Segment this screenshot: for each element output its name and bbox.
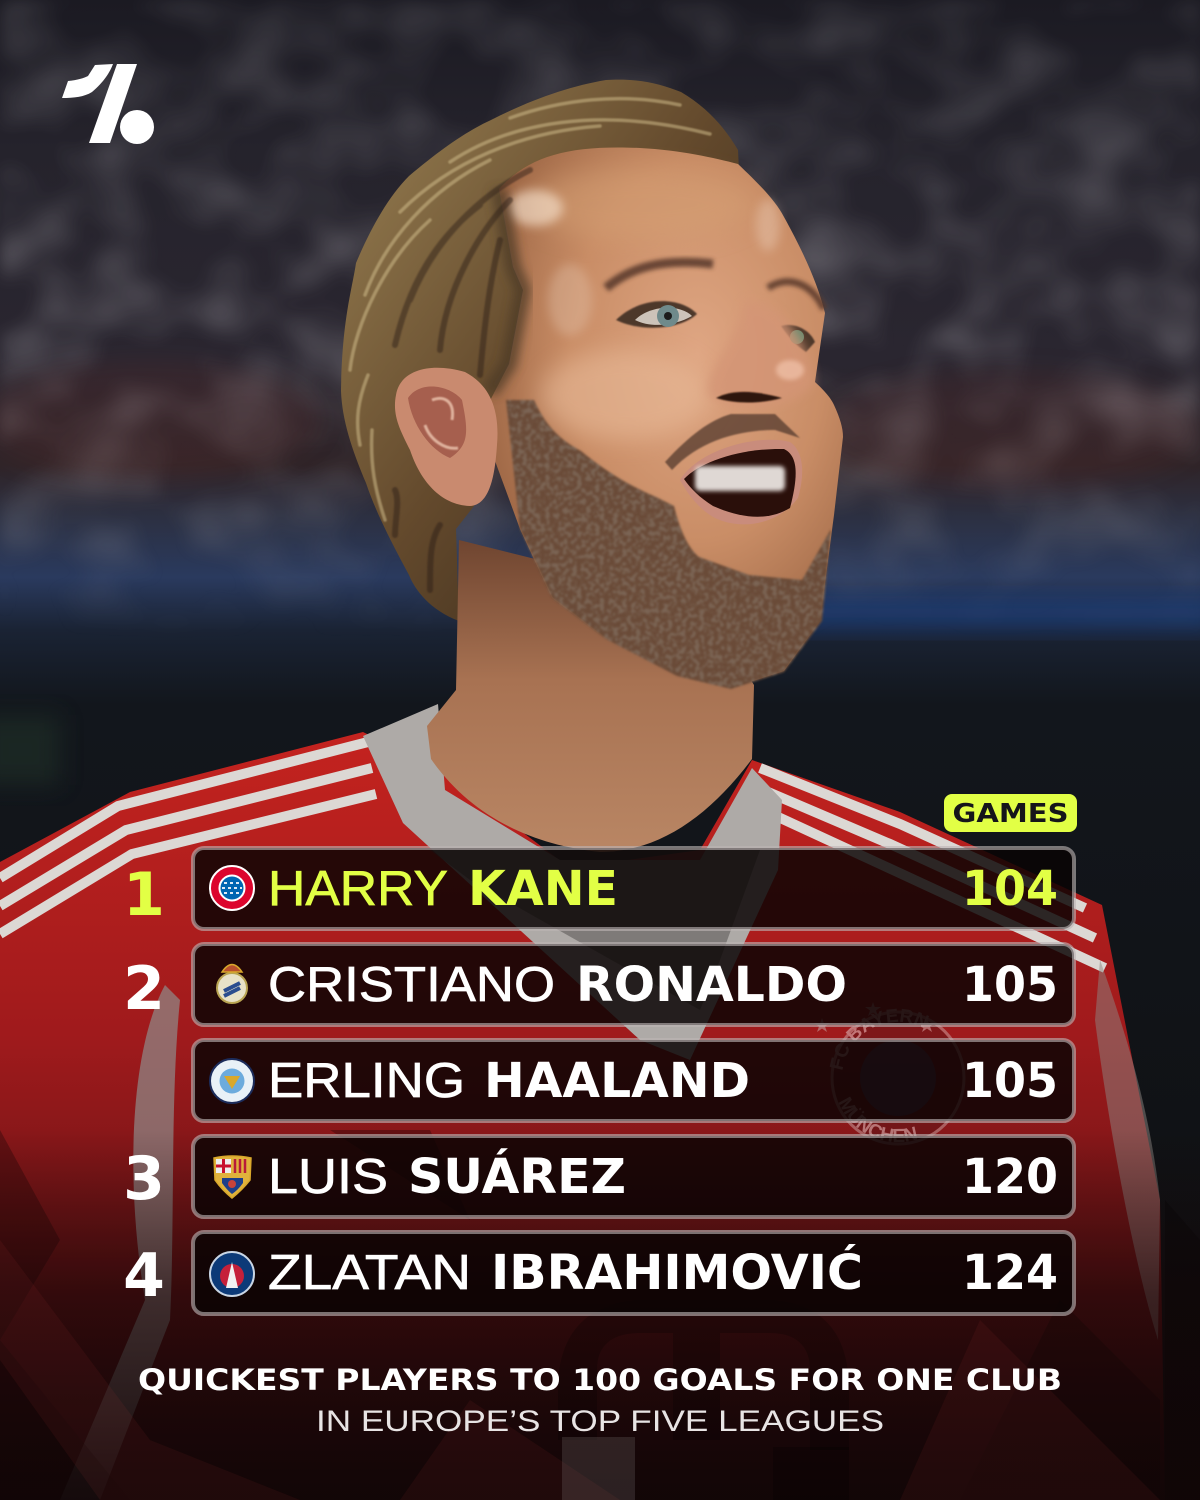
face xyxy=(480,147,843,688)
row: Erling Haaland: ERLING xyxy=(268,1054,465,1108)
rank 1: 1 xyxy=(123,860,165,930)
badge: games column header xyxy=(944,794,1077,832)
hairline shadow xyxy=(490,189,523,392)
crest: PSG xyxy=(210,1252,254,1296)
row: Cristiano Ronaldo: CRISTIANO xyxy=(268,958,555,1012)
row: Cristiano Ronaldo: RONALDO xyxy=(576,957,847,1013)
beard xyxy=(506,400,831,689)
badge: games column header: GAMES xyxy=(952,799,1068,829)
row: Erling Haaland xyxy=(193,1040,1074,1121)
crest: Barcelona xyxy=(214,1156,251,1198)
background: blurred stadium crowd xyxy=(0,0,1200,785)
crest: Real Madrid xyxy=(217,964,247,1003)
crest: Bayern xyxy=(210,866,254,910)
moustache xyxy=(665,414,800,470)
row: Zlatan Ibrahimović: 124 xyxy=(962,1245,1058,1301)
crest: Manchester City xyxy=(210,1059,254,1103)
eyes and brows xyxy=(606,262,824,352)
forehead and cheek lighting xyxy=(507,169,780,440)
caption: IN EUROPE’S TOP FIVE LEAGUES xyxy=(316,1405,884,1438)
grey underarm panels xyxy=(60,985,180,1500)
row: Luis Suárez: LUIS xyxy=(268,1150,388,1204)
rank 4: 4 xyxy=(123,1241,165,1311)
row: Erling Haaland: HAALAND xyxy=(484,1053,750,1109)
rank 3: 3 xyxy=(123,1144,165,1214)
shirt chevrons xyxy=(0,1130,1200,1500)
shirt number xyxy=(558,1300,849,1500)
row: Harry Kane: KANE xyxy=(468,861,618,917)
row: Cristiano Ronaldo xyxy=(193,944,1074,1025)
row: Zlatan Ibrahimović xyxy=(193,1232,1074,1314)
nose xyxy=(708,300,813,407)
bottom fade and chevron pattern xyxy=(0,1130,1200,1500)
caption: QUICKEST PLAYERS TO 100 GOALS FOR ONE CLUB xyxy=(138,1363,1062,1397)
jersey crest and stars: MÜNCHEN xyxy=(839,1097,917,1142)
row: Cristiano Ronaldo: 105 xyxy=(962,957,1058,1013)
jersey crest and stars: FC BAYERN xyxy=(830,1009,929,1070)
row: Zlatan Ibrahimović: IBRAHIMOVIĆ xyxy=(491,1244,863,1301)
sleeve stripes xyxy=(0,742,1105,968)
rank 2: 2 xyxy=(123,954,165,1024)
hair xyxy=(341,80,740,621)
logo: OneFootball xyxy=(62,64,154,144)
neck xyxy=(427,540,754,852)
jersey crest and stars xyxy=(817,1003,966,1146)
hair strands xyxy=(350,99,710,590)
mouth xyxy=(680,440,802,524)
collar and grey chest panel xyxy=(363,704,782,1060)
row: Luis Suárez: SUÁREZ xyxy=(408,1148,626,1205)
row: Harry Kane xyxy=(193,848,1074,929)
row: Erling Haaland: 105 xyxy=(962,1053,1058,1109)
caption xyxy=(138,1363,1062,1438)
row: Luis Suárez xyxy=(193,1136,1074,1217)
jersey body xyxy=(0,732,1165,1500)
row: Harry Kane: 104 xyxy=(962,861,1058,917)
ear xyxy=(395,368,498,506)
row: Luis Suárez: 120 xyxy=(962,1149,1058,1205)
row: Harry Kane: HARRY xyxy=(268,862,448,916)
row: Zlatan Ibrahimović: ZLATAN xyxy=(268,1246,471,1300)
